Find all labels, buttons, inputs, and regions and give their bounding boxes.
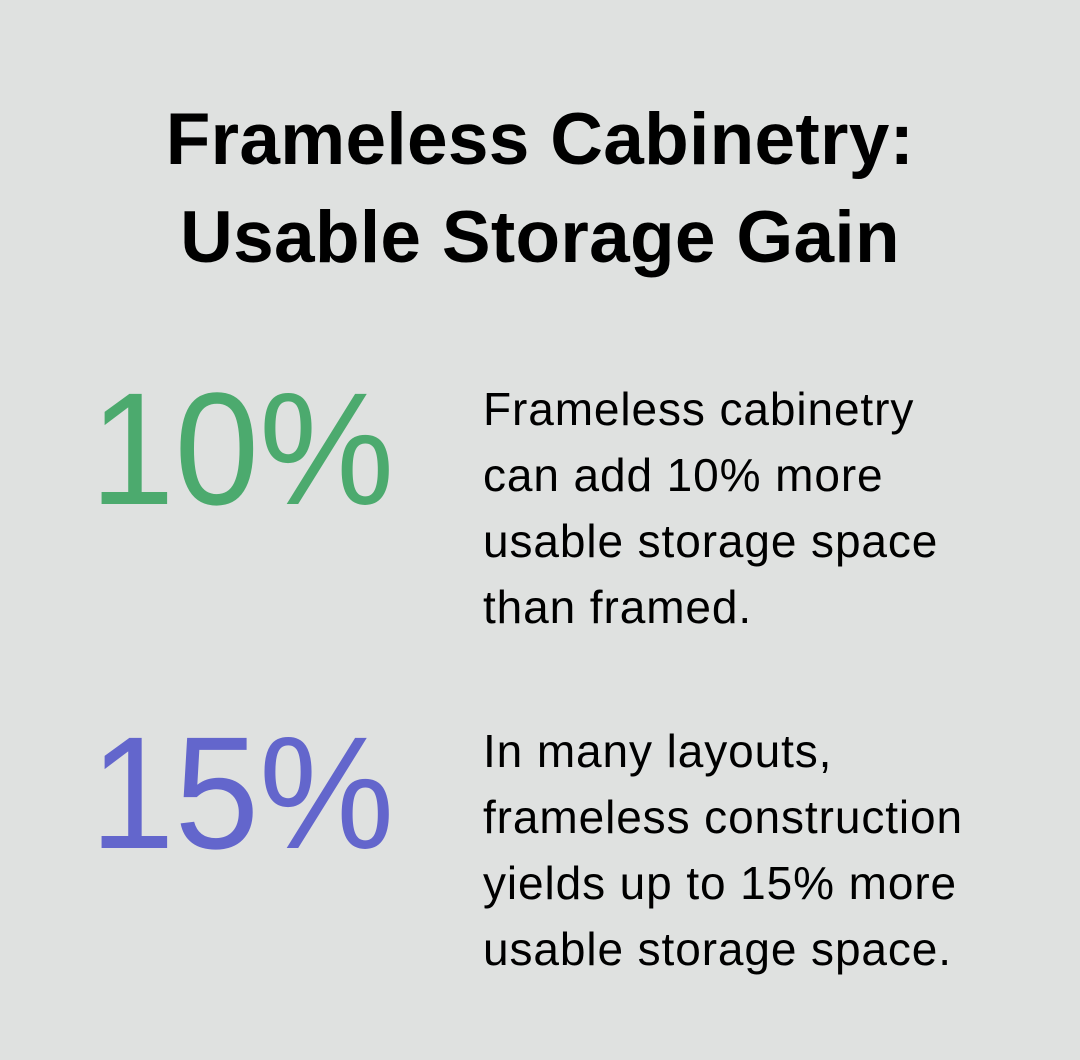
title: Usable Storage Gain <box>180 197 900 278</box>
text: 10% description: usable storage space <box>483 515 938 567</box>
stat: 15%: 15% <box>90 703 394 882</box>
stat: 10%: 10% <box>90 359 394 538</box>
text: 10% description: than framed. <box>483 581 752 633</box>
text: 15% description: In many layouts, <box>483 725 832 777</box>
text: 15% description: frameless construction <box>483 791 963 843</box>
text: 15% description: yields up to 15% more <box>483 857 957 909</box>
text: 15% description: usable storage space. <box>483 923 952 975</box>
text: 15% description <box>483 725 963 975</box>
text: 10% description: can add 10% more <box>483 449 884 501</box>
text: 10% description: Frameless cabinetry <box>483 383 914 435</box>
title <box>166 99 914 278</box>
title: Frameless Cabinetry: <box>166 99 914 180</box>
text: 10% description <box>483 383 938 633</box>
